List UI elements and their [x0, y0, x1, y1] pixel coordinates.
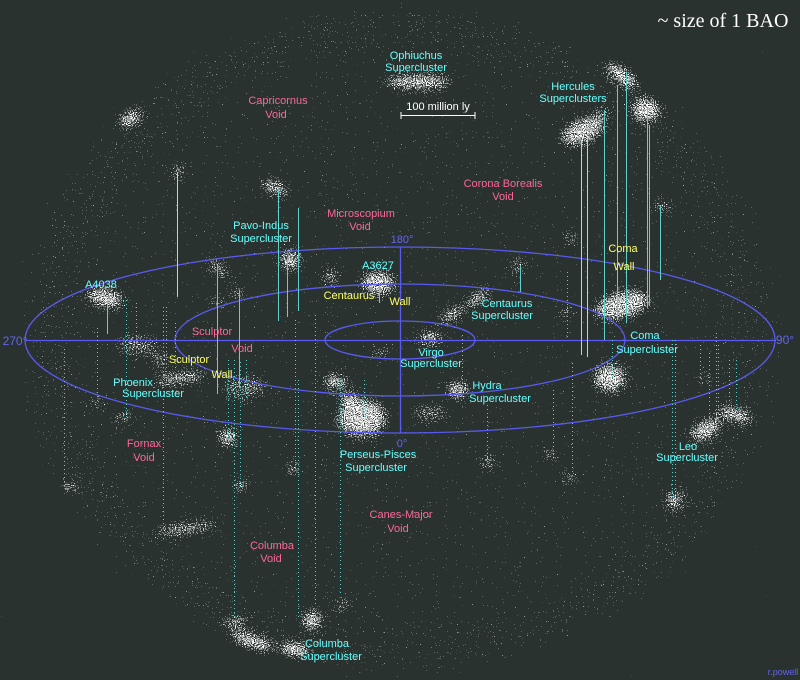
- void labels: Fornax: [127, 438, 162, 450]
- supercluster labels: Virgo: [418, 347, 444, 359]
- void labels: Capricornus: [248, 95, 308, 107]
- wall labels: Coma: [608, 243, 639, 255]
- supercluster labels: Coma: [630, 330, 661, 342]
- supercluster labels: Supercluster: [122, 388, 184, 400]
- supercluster labels: Hercules: [551, 81, 595, 93]
- supercluster labels: Supercluster: [471, 310, 533, 322]
- void labels: Void: [231, 343, 253, 355]
- void labels: [127, 95, 543, 565]
- void labels: Canes-Major: [370, 509, 433, 521]
- angle labels: 90°: [776, 333, 794, 347]
- supercluster labels: Supercluster: [469, 393, 531, 405]
- supercluster labels: [85, 50, 718, 663]
- dotted drop lines below the plane: [64, 272, 736, 620]
- void labels: Void: [265, 109, 287, 121]
- credit: r.powell: [768, 667, 798, 677]
- void labels: Sculptor: [192, 326, 233, 338]
- void labels: Corona Borealis: [464, 178, 543, 190]
- void labels: Void: [133, 452, 155, 464]
- supercluster labels: Supercluster: [385, 62, 447, 74]
- supercluster labels: Supercluster: [300, 651, 362, 663]
- void labels: Void: [349, 221, 371, 233]
- angle labels: 0°: [397, 438, 407, 450]
- supercluster labels: Perseus-Pisces: [340, 449, 417, 461]
- scale bar: 100 million ly: 100 million ly: [406, 101, 470, 113]
- void labels: Void: [492, 191, 514, 203]
- supercluster labels: Supercluster: [656, 452, 718, 464]
- supercluster labels: Supercluster: [616, 344, 678, 356]
- wall labels: [169, 243, 639, 381]
- angle labels: 180°: [391, 234, 413, 246]
- wall labels: Wall: [390, 296, 410, 308]
- supercluster labels: Supercluster: [230, 233, 292, 245]
- supercluster labels: Columba: [305, 638, 350, 650]
- void labels: Columba: [250, 540, 295, 552]
- supercluster labels: Supercluster: [400, 358, 462, 370]
- supercluster labels: Ophiuchus: [390, 50, 443, 62]
- wall labels: Centaurus: [324, 290, 375, 302]
- title: size of 1 BAO: ~ size of 1 BAO: [658, 10, 788, 32]
- solid drop lines above the plane: [108, 72, 660, 394]
- wall labels: Wall: [614, 261, 634, 273]
- supercluster labels: Leo: [679, 441, 697, 453]
- supercluster labels: Hydra: [472, 380, 503, 392]
- wall labels: Sculptor: [169, 354, 210, 366]
- supercluster labels: A3627: [362, 260, 394, 272]
- void labels: Microscopium: [327, 208, 395, 220]
- supercluster labels: Supercluster: [345, 462, 407, 474]
- supercluster labels: Superclusters: [539, 93, 607, 105]
- supercluster labels: Pavo-Indus: [233, 220, 289, 232]
- supercluster labels: A4038: [85, 279, 117, 291]
- supercluster labels: Centaurus: [482, 298, 533, 310]
- scale bar: 100 million ly: [401, 101, 475, 119]
- angle labels: 270°: [3, 334, 28, 348]
- wall labels: Wall: [212, 369, 232, 381]
- void labels: Void: [260, 553, 282, 565]
- angle labels: [3, 234, 794, 450]
- reference plane: concentric rings with axes: [25, 247, 775, 433]
- void labels: Void: [387, 523, 409, 535]
- supercluster labels: Phoenix: [113, 377, 153, 389]
